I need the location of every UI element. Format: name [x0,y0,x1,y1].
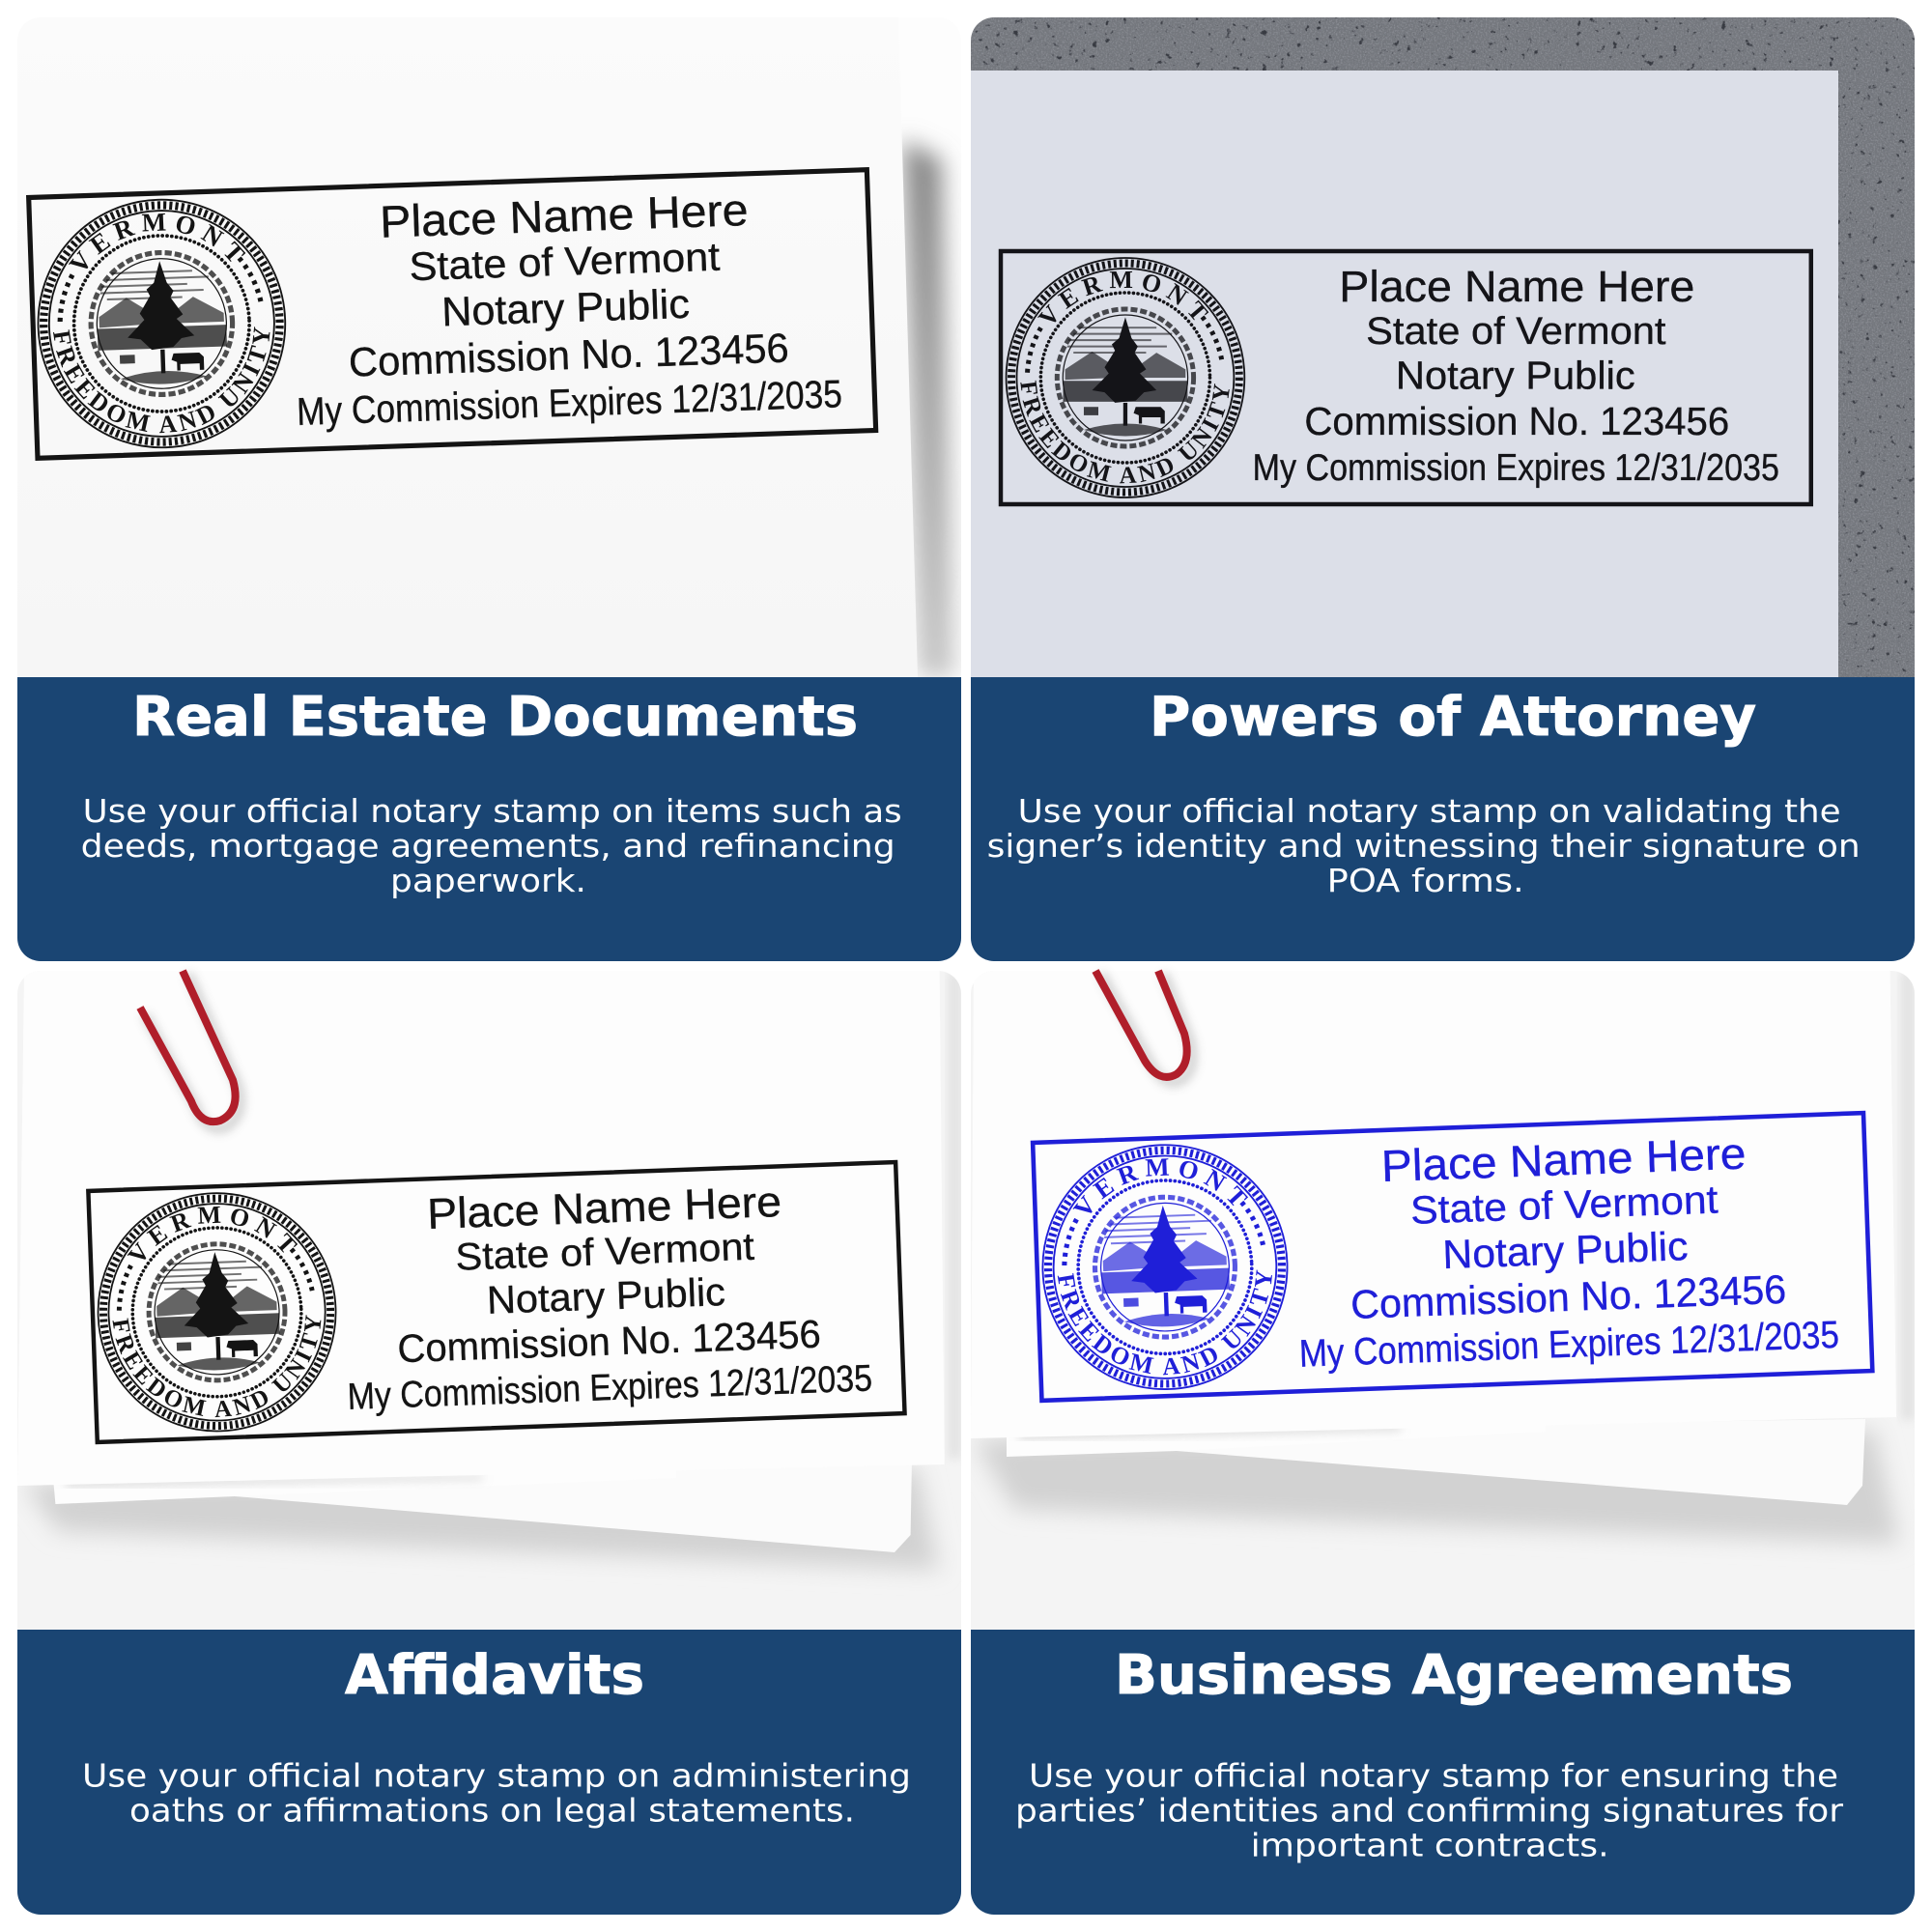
stamp text lines: Place Name Here [1339,262,1694,311]
state seal [1005,257,1246,498]
panel: business agreements [971,969,1915,1915]
stamp text lines: Commission No. 123456 [1304,399,1729,443]
stamp impression: black, tilted [86,1159,907,1445]
caption bar [971,677,1915,961]
description: Use your official notary stamp for ensuring the [1029,1757,1838,1795]
photo: stacked papers with paperclip [17,971,961,1637]
stamp text lines: Place Name Here [379,185,749,247]
state seal: VERMONT [128,1206,298,1260]
state seal: FREEDOM AND UNITY [1057,1269,1272,1376]
stamp text lines: Commission No. 123456 [397,1312,821,1371]
stamp text lines: Commission No. 123456 [348,325,789,385]
stamp text lines: Notary Public [486,1269,726,1322]
icon: red paperclip [1095,971,1193,1083]
heading: Business Agreements [1115,1644,1793,1707]
stamp text lines: Notary Public [1442,1223,1689,1277]
description: deeds, mortgage agreements, and refinancing [81,827,895,865]
stamp text lines: Notary Public [1396,354,1635,398]
stamp text lines [340,1176,873,1418]
stamp text lines: My Commission Expires 12/31/2035 [1298,1314,1840,1376]
state seal: VERMONT [69,213,245,269]
stamp text lines [1292,1124,1840,1376]
state seal: FREEDOM AND UNITY [112,1315,321,1418]
heading: Affidavits [345,1644,644,1707]
stamp text lines: My Commission Expires 12/31/2035 [347,1357,873,1418]
description: signer’s identity and witnessing their signature on [987,827,1861,865]
stamp text lines: Place Name Here [1380,1128,1747,1191]
stamp impression: blue, tilted [1030,1111,1875,1403]
heading: Powers of Attorney [1150,686,1756,749]
stamp text lines: Notary Public [440,281,691,334]
description: POA forms. [1327,862,1524,899]
description: oaths or affirmations on legal statements. [129,1792,855,1830]
caption bar [17,1630,961,1915]
stamp text lines: My Commission Expires 12/31/2035 [296,372,843,434]
panel: powers of attorney [971,17,1915,961]
description: important contracts. [1251,1827,1609,1864]
description: paperwork. [390,862,586,899]
stamp text lines [290,182,843,434]
description [81,792,902,899]
state seal: FREEDOM AND UNITY [1020,381,1230,483]
photo: paper on concrete [971,17,1915,684]
state seal [1041,1144,1289,1390]
caption bar [971,1630,1915,1915]
description [82,1757,911,1830]
state seal: VERMONT [1037,270,1209,323]
state seal [97,1192,336,1432]
stamp impression: black, tilted [26,167,879,461]
stamp impression: black, straight [999,249,1813,506]
icon: red paperclip [140,971,241,1129]
panel: real estate documents [17,129,961,961]
stamp text lines: State of Vermont [409,234,722,289]
stamp text lines: State of Vermont [455,1226,755,1279]
description: Use your official notary stamp on administering [82,1757,911,1795]
photo: white paper with shadow [17,129,961,677]
description: Use your official notary stamp on validating the [1018,792,1841,830]
stamp text lines [1253,262,1779,489]
caption bar [17,677,961,961]
state seal: FREEDOM AND UNITY [53,327,270,433]
description [987,792,1861,899]
description [1015,1757,1843,1864]
description: Use your official notary stamp on items such as [83,792,902,830]
description: parties’ identities and confirming signatures for [1015,1792,1843,1830]
stamp text lines: Commission No. 123456 [1350,1266,1787,1327]
stamp text lines: Place Name Here [426,1179,782,1238]
state seal [37,199,286,448]
heading: Real Estate Documents [132,686,858,749]
stamp text lines: State of Vermont [1366,310,1666,353]
photo: stacked papers with paperclip [971,971,1915,1637]
stamp text lines: My Commission Expires 12/31/2035 [1253,447,1779,489]
stamp text lines: State of Vermont [1409,1177,1719,1233]
state seal: VERMONT [1072,1158,1248,1213]
panel: affidavits [17,969,961,1915]
